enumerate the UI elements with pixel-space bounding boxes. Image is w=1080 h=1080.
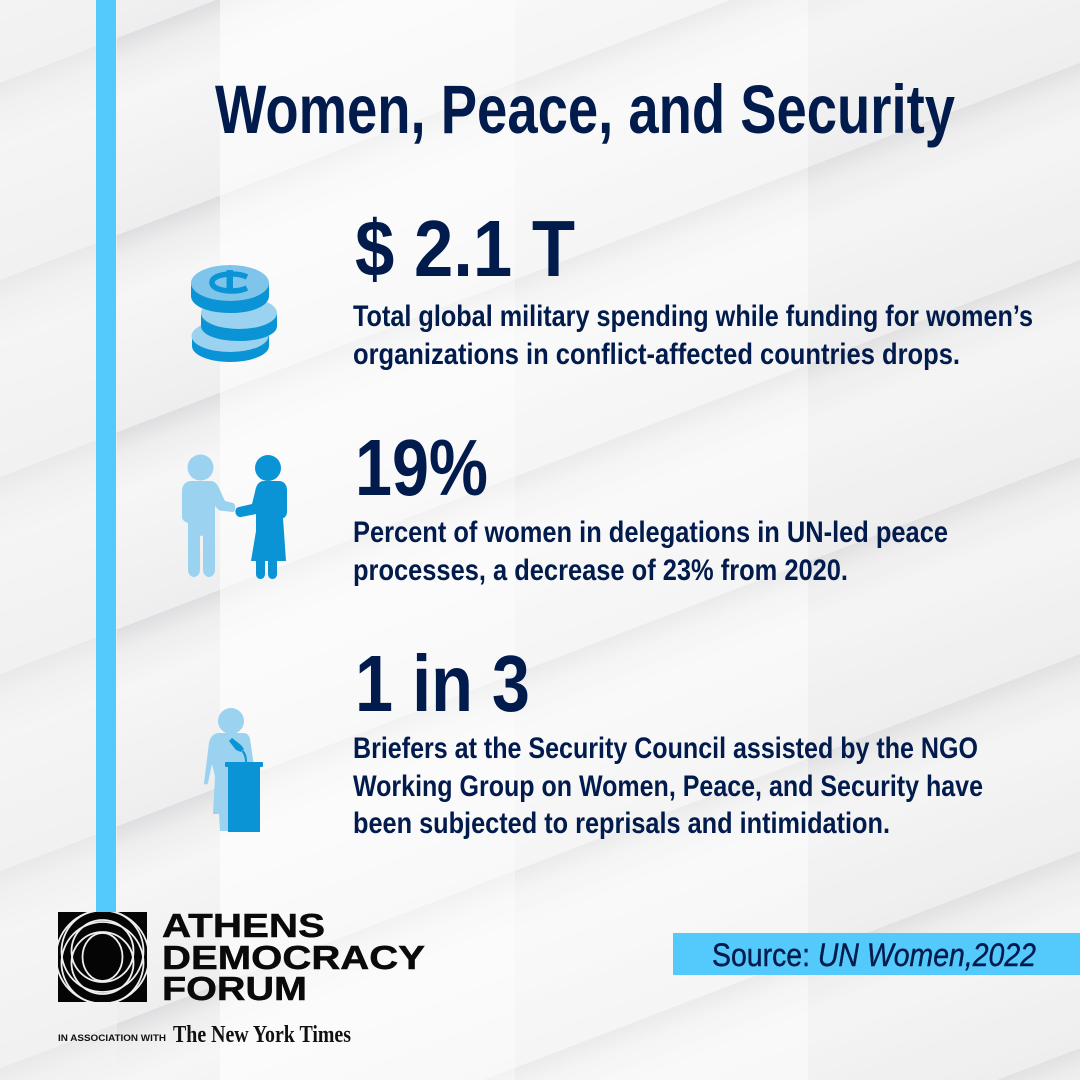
stat block: briefers [353, 639, 983, 840]
association line: The New York Times [173, 1022, 351, 1048]
stat value: 19% [355, 423, 488, 512]
stat value: $ 2.1 T [355, 204, 575, 293]
speaker figure [204, 708, 254, 831]
icon: coin stack [191, 265, 277, 362]
stat description [353, 516, 948, 587]
stat description: been subjected to reprisals and intimidation. [353, 807, 890, 840]
association line [58, 1022, 351, 1048]
logo wordmark [162, 908, 425, 1008]
icon: handshake [182, 454, 287, 579]
podium with microphone [225, 738, 263, 832]
logo wordmark: DEMOCRACY [162, 940, 425, 977]
logo wordmark: ATHENS [162, 908, 325, 945]
stat description [353, 732, 983, 840]
stat block: women in delegations [353, 423, 948, 587]
stat description: organizations in conflict-affected countries drops. [353, 338, 960, 371]
stat description: Briefers at the Security Council assisted by the NGO [353, 732, 978, 765]
left figure [182, 454, 235, 577]
logo wordmark: FORUM [162, 971, 307, 1008]
vertical accent bar [96, 0, 116, 912]
logo mark [56, 910, 149, 1004]
logo: Athens Democracy Forum [56, 908, 425, 1048]
stat description [353, 300, 1033, 371]
association line: IN ASSOCIATION WITH [58, 1033, 166, 1044]
icon: speaker at podium [204, 708, 263, 832]
stat description: Percent of women in delegations in UN-led peace [353, 516, 948, 549]
stat block: military spending [353, 204, 1033, 371]
right figure [235, 455, 287, 579]
stat value: 1 in 3 [355, 639, 530, 728]
stat description: processes, a decrease of 23% from 2020. [353, 554, 848, 587]
source callout: Source: UN Women,2022 [712, 937, 1036, 973]
